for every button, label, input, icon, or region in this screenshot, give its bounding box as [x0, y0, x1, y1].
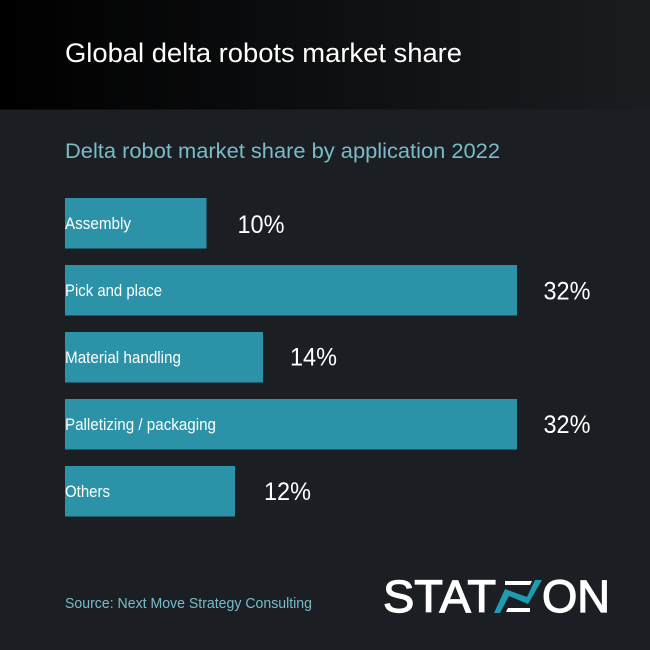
title: Global delta robots market share — [65, 38, 462, 68]
bar: Others: 12% — [264, 478, 311, 506]
bar: Assembly: 10% — [238, 211, 284, 239]
source note: Source: Next Move Strategy Consulting — [65, 596, 312, 612]
bar: Others — [65, 466, 311, 516]
bar: Pick and place: Pick and place — [65, 281, 162, 300]
bar: Material handling: 14% — [290, 344, 337, 372]
logo — [383, 571, 610, 622]
logo: ON — [542, 571, 610, 622]
bar: Palletizing / packaging: 32% — [544, 411, 590, 439]
bar: Assembly: Assembly — [65, 214, 131, 233]
icon: logo zigzag mark — [494, 580, 542, 613]
bar: Material handling: Material handling — [65, 348, 181, 367]
bar: Pick and place — [65, 265, 590, 316]
bar: Pick and place: 32% — [544, 278, 590, 306]
bar: Others: Others — [65, 482, 110, 501]
bar: Palletizing / packaging: Palletizing / packaging — [65, 415, 216, 434]
header band — [0, 0, 650, 110]
bar: Palletizing / packaging — [65, 399, 590, 450]
bar: Assembly — [65, 198, 284, 248]
logo: STAT — [383, 571, 496, 622]
bar: Material handling — [65, 332, 337, 382]
subtitle: Delta robot market share by application 2022 — [65, 139, 500, 163]
bar chart — [65, 198, 590, 516]
